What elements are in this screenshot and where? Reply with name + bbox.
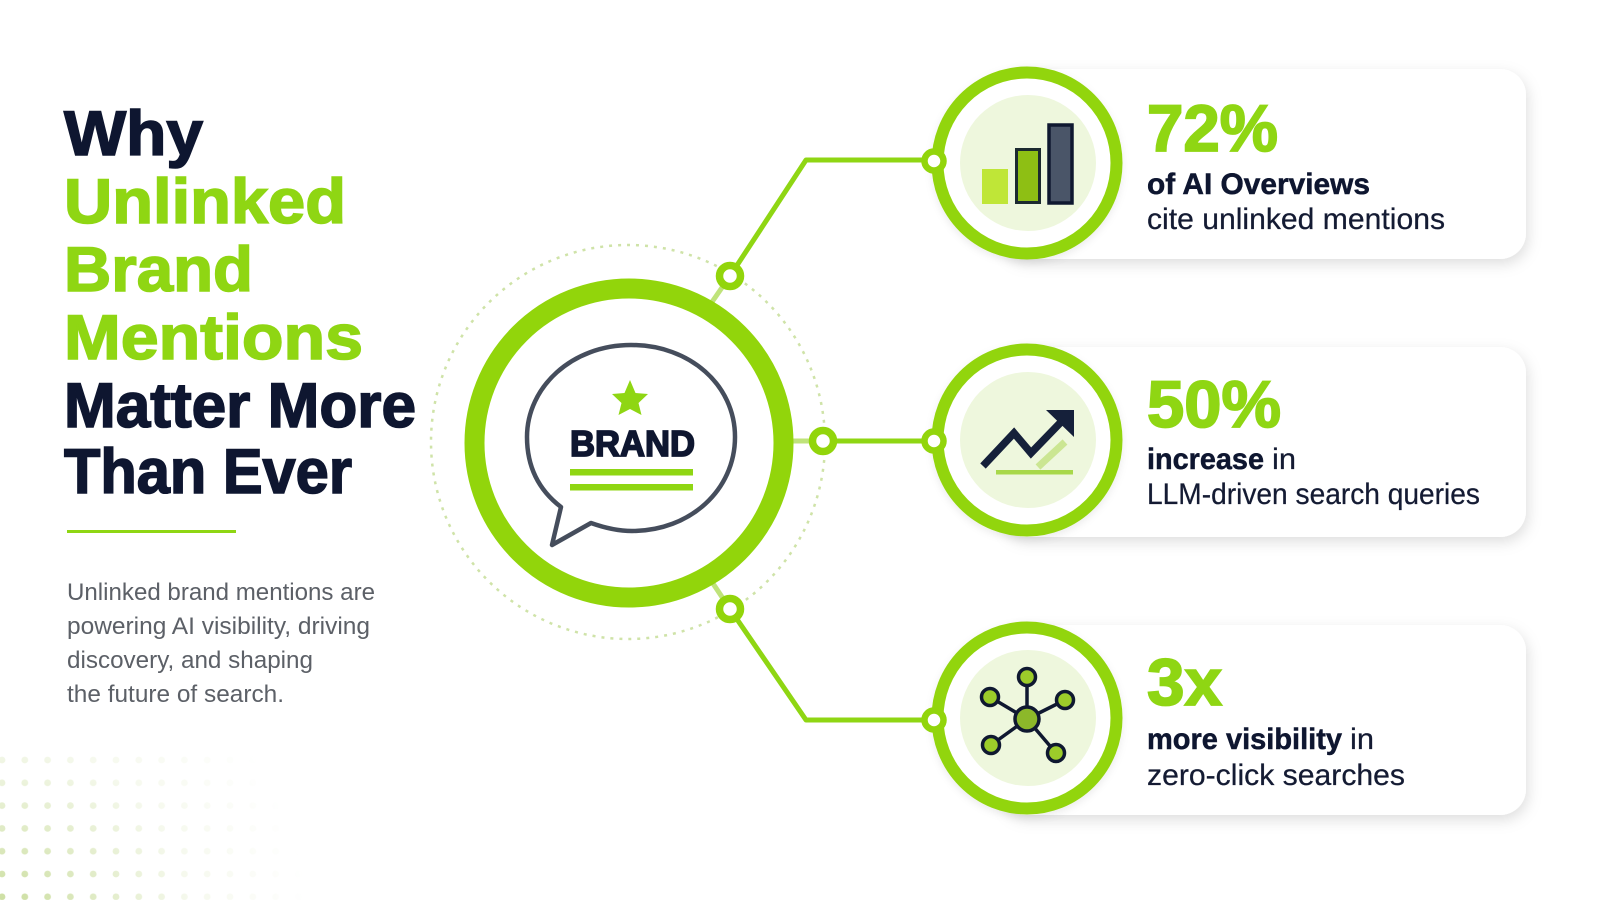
icon circle: trend arrow xyxy=(938,350,1116,530)
icon circle: network xyxy=(938,628,1116,808)
brand underlines xyxy=(570,469,693,490)
description text: the future of search. xyxy=(67,681,284,708)
stat description xyxy=(1147,443,1480,511)
description text: Unlinked brand mentions are xyxy=(67,579,375,606)
stat description: in xyxy=(1350,723,1374,756)
stat value: 72% xyxy=(1147,91,1278,165)
title: Mentions xyxy=(64,303,363,373)
icon: star xyxy=(612,380,648,415)
stat description: cite unlinked mentions xyxy=(1147,203,1445,236)
stat description xyxy=(1147,168,1445,236)
title underline xyxy=(67,530,236,533)
panel: 3x stat card xyxy=(924,625,1526,815)
brand label: BRAND xyxy=(570,423,695,464)
icon circle: bar chart xyxy=(938,72,1116,254)
stat value: 3x xyxy=(1147,645,1222,719)
title xyxy=(64,99,416,507)
description text: discovery, and shaping xyxy=(67,647,313,674)
icon: speech bubble xyxy=(527,345,735,545)
connector nodes on hub xyxy=(720,266,834,620)
connector node xyxy=(924,152,944,170)
connector node xyxy=(924,432,944,450)
dotted orbit ring xyxy=(431,245,825,639)
stat description xyxy=(1147,723,1405,792)
stat description: LLM-driven search queries xyxy=(1147,478,1480,511)
connector: hub to 72% card xyxy=(712,160,934,302)
title: Brand xyxy=(64,235,253,305)
description text xyxy=(67,579,375,708)
connector: hub to 3x card xyxy=(712,582,934,720)
panel: 72% stat card xyxy=(924,69,1526,259)
title: Than Ever xyxy=(64,437,352,507)
stat description: of AI Overviews xyxy=(1147,168,1370,201)
title: Why xyxy=(64,99,203,169)
connector node xyxy=(924,710,944,730)
stat description: zero-click searches xyxy=(1147,759,1405,792)
stat description: more visibility xyxy=(1147,723,1343,756)
stat value: 50% xyxy=(1147,367,1281,441)
description text: powering AI visibility, driving xyxy=(67,613,370,640)
panel: 50% stat card xyxy=(924,347,1526,537)
title: Unlinked xyxy=(64,167,346,237)
stat description: increase xyxy=(1147,443,1264,476)
connector: hub to 50% card xyxy=(793,438,934,444)
hub ring xyxy=(474,288,784,598)
stat description: in xyxy=(1272,443,1296,476)
central brand hub xyxy=(474,288,784,598)
title: Matter More xyxy=(64,371,416,441)
background dot pattern xyxy=(0,756,233,900)
